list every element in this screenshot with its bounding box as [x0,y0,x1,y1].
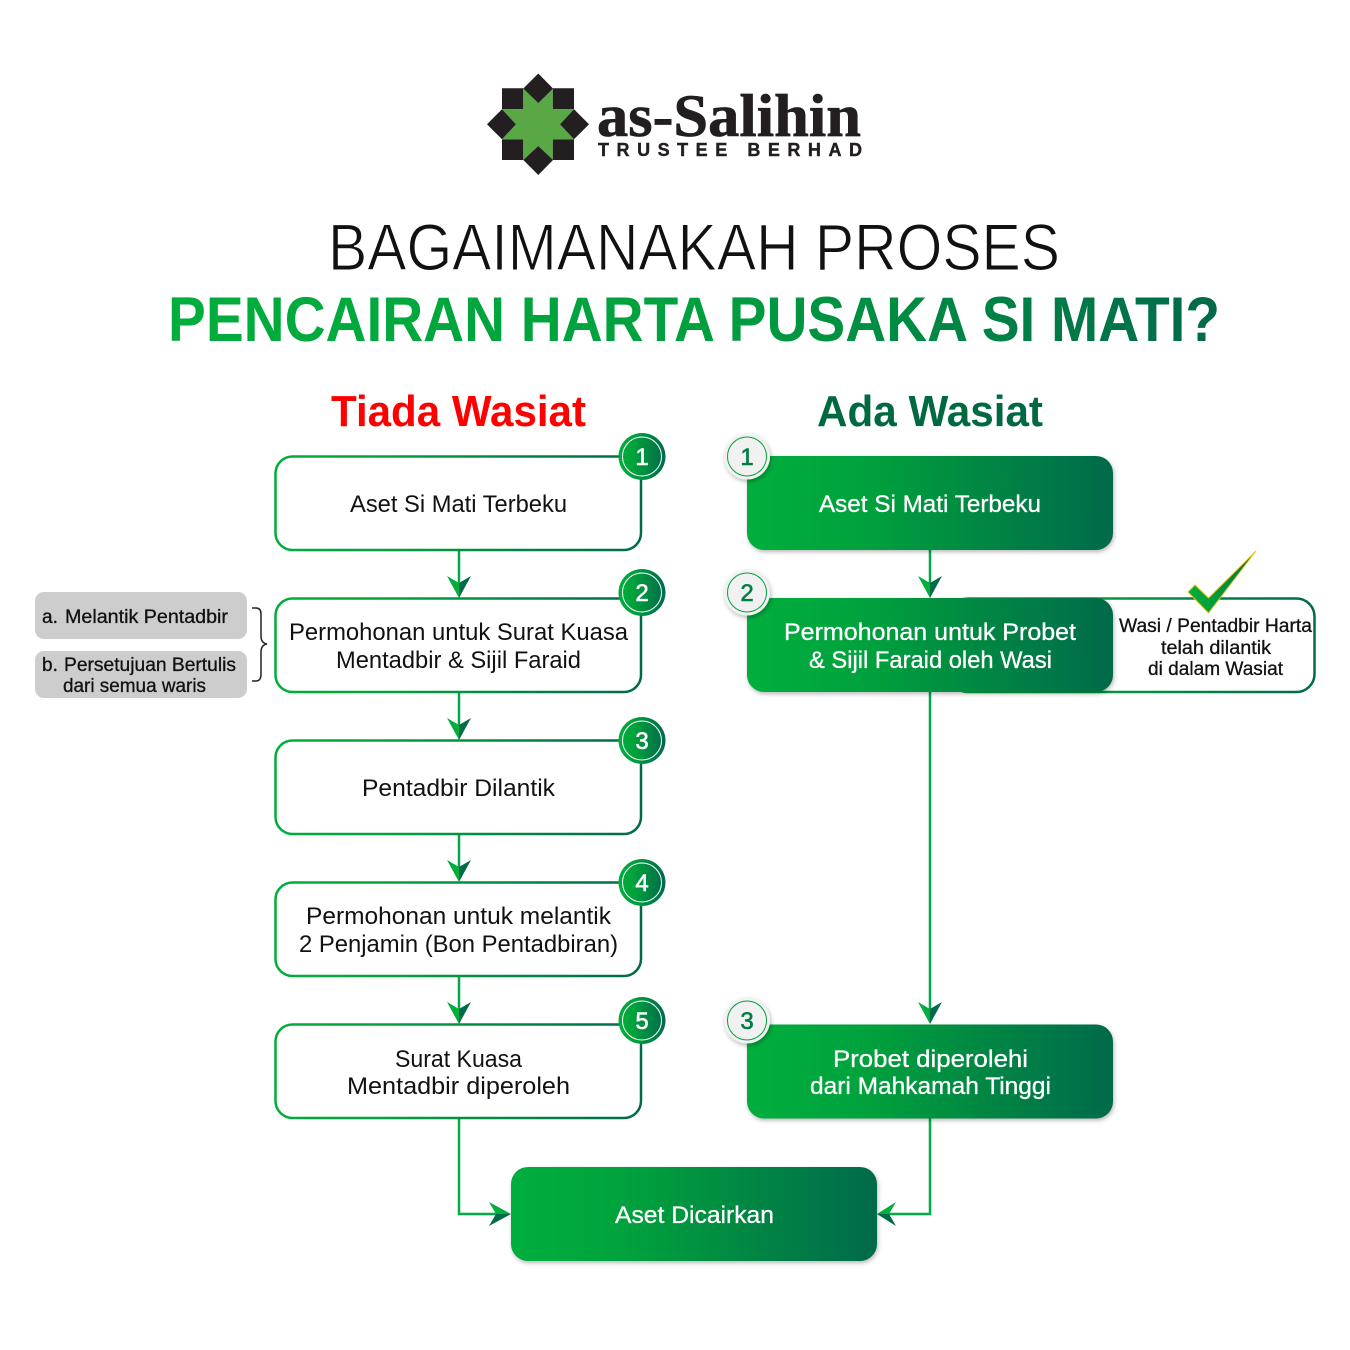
badge: right 2: 2 [740,580,754,607]
logo: as-Salihin Trustee Berhad [487,74,862,175]
panel: left step 5 [276,1024,641,1118]
brace [252,608,267,681]
badge: left 3 [618,717,666,764]
panel: right step 1 [747,456,1113,550]
note a: a. [42,607,58,628]
panel: left step 2 [276,598,641,692]
badge: right 3: 3 [740,1008,754,1035]
badge: left 2: 2 [635,580,649,607]
panel: left step 2: Mentadbir & Sijil Faraid [336,647,581,674]
logo tagline: TRUSTEE BERHAD [598,140,862,160]
side notes: grey boxes [35,592,247,698]
panel: left step 3 [276,740,641,834]
badge: left 5: 5 [635,1008,649,1035]
title line 2: PENCAIRAN HARTA PUSAKA SI MATI? [168,285,1220,355]
panel: left step 2: Permohonan untuk Surat Kuasa [289,619,629,646]
panel: left step 3: Pentadbir Dilantik [362,775,556,802]
panel: left step 4 [276,882,641,976]
note a [35,592,247,639]
badge: right 3 [724,998,770,1044]
panel: left step 4: 2 Penjamin (Bon Pentadbiran) [299,931,618,958]
badge: left 5 [618,997,666,1044]
note b: Persetujuan Bertulis [64,655,236,676]
badge: right 1 [724,434,770,480]
connector: left column to final box [459,1118,511,1226]
icon: octagram star [487,74,589,175]
panel: left step 5: Mentadbir diperoleh [347,1073,570,1100]
connector: right column to final box [877,1118,930,1226]
panel: left step 1 [276,456,641,550]
badge: left 4: 4 [635,870,649,897]
badge: left 3: 3 [635,728,649,755]
note b [35,651,247,698]
callout: executor appointed in will: Wasi / Pentadbir Harta [1119,616,1312,637]
panel: right step 3: dari Mahkamah Tinggi [810,1073,1051,1100]
badge: right 1: 1 [740,444,754,471]
title line 1: BAGAIMANAKAH PROSES [328,210,1060,284]
panel: final assets released [511,1167,877,1261]
panel: left step 4: Permohonan untuk melantik [306,903,612,930]
panel: right step 2: & Sijil Faraid oleh Wasi [809,647,1052,674]
callout: executor appointed in will: di dalam Wasiat [1148,659,1284,680]
callout: executor appointed in will: telah dilantik [1161,638,1272,659]
logo wordmark: as-Salihin [597,83,861,149]
callout: executor appointed in will [950,598,1314,692]
heading: Ada Wasiat: Ada Wasiat [817,387,1043,436]
connectors: right column [918,550,942,1024]
panel: left step 5: Surat Kuasa [395,1046,523,1073]
panel: right step 2: Permohonan untuk Probet [784,619,1076,646]
panel: right step 3 [747,1024,1113,1118]
icon: check mark [1188,551,1256,613]
badge: right 2 [724,570,770,616]
panel: final assets released: Aset Dicairkan [615,1202,774,1229]
badge: left 2 [618,569,666,616]
panel: left step 1: Aset Si Mati Terbeku [350,491,567,518]
heading: Tiada Wasiat: Tiada Wasiat [331,387,586,436]
note b: b. [42,655,58,676]
note a: Melantik Pentadbir [65,607,229,628]
badge: left 4 [618,859,666,906]
note b: dari semua waris [63,676,206,697]
badge: left 1 [618,433,666,480]
badge: left 1: 1 [635,444,649,471]
connectors: left column [447,550,471,1024]
panel: right step 1: Aset Si Mati Terbeku [819,491,1041,518]
panel: right step 3: Probet diperolehi [833,1046,1028,1073]
panel: right step 2 [747,598,1113,692]
